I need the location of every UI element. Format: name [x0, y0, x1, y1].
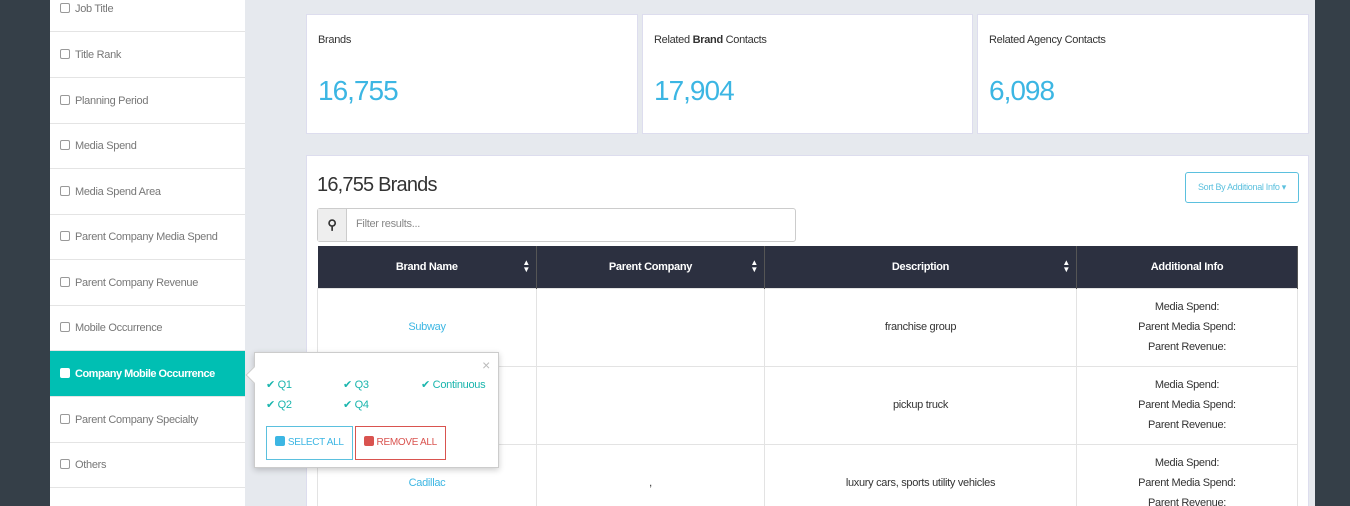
sidebar filter list: Others — [75, 459, 106, 471]
data table: ▲ — [522, 258, 530, 267]
data table: Parent Company — [609, 261, 692, 273]
data table: pickup truck — [893, 399, 948, 411]
data table: franchise group — [885, 321, 956, 333]
data table: Parent Media Spend: — [1138, 321, 1236, 333]
card: related agency contacts: Related Agency Contacts — [989, 34, 1106, 46]
data table: Parent Media Spend: — [1138, 477, 1236, 489]
card: related brand contacts — [642, 14, 973, 134]
sidebar filter list: Planning Period — [75, 95, 148, 107]
sidebar filter list: Job Title — [75, 3, 113, 15]
popover: quarter options: ✔ Q2 — [266, 399, 292, 411]
card: related agency contacts: 6,098 — [989, 75, 1054, 106]
card: brands: 16,755 — [318, 75, 398, 106]
card: related brand contacts: 17,904 — [654, 75, 734, 106]
data table: Media Spend: — [1155, 379, 1219, 391]
sidebar filter list: Parent Company Media Spend — [75, 231, 218, 243]
remove all button: REMOVE ALL — [377, 437, 437, 448]
popover: quarter options: ✔ Continuous — [421, 379, 485, 391]
select all button: SELECT ALL — [288, 437, 344, 448]
data table — [317, 246, 1298, 506]
popover: quarter options: ✔ Q3 — [343, 379, 369, 391]
data table: Brand Name — [396, 261, 458, 273]
left dark strip — [0, 0, 50, 506]
active filter item: Company Mobile Occurrence — [75, 368, 215, 380]
card: related agency contacts — [977, 14, 1309, 134]
sidebar filter list: Mobile Occurrence — [75, 322, 162, 334]
data table: Parent Revenue: — [1148, 419, 1226, 431]
sort button — [1185, 172, 1299, 203]
search box: ⚲ — [327, 217, 337, 232]
sidebar filter list: Media Spend Area — [75, 186, 161, 198]
popover: quarter options — [254, 352, 499, 468]
popover: quarter options: ✔ Q4 — [343, 399, 369, 411]
sidebar filter list — [50, 0, 245, 506]
data table: ▲ — [1062, 258, 1070, 267]
search box — [317, 208, 796, 242]
sidebar filter list: Parent Company Revenue — [75, 277, 198, 289]
card: brands: Brands — [318, 34, 351, 46]
data table: luxury cars, sports utility vehicles — [846, 477, 995, 489]
data table: Parent Media Spend: — [1138, 399, 1236, 411]
data table: Additional Info — [1151, 261, 1223, 273]
data table: , — [649, 477, 652, 489]
remove all button — [355, 426, 446, 460]
card: brands — [306, 14, 638, 134]
sidebar filter list: Media Spend — [75, 140, 137, 152]
card: related brand contacts: Related Brand Contacts — [654, 34, 767, 46]
popover: quarter options: ✔ Q1 — [266, 379, 292, 391]
data table: Subway — [408, 321, 446, 333]
sidebar filter list: Parent Company Specialty — [75, 414, 198, 426]
data table: Parent Revenue: — [1148, 341, 1226, 353]
data table: Cadillac — [409, 477, 445, 489]
select all button — [266, 426, 353, 460]
data table: Description — [892, 261, 949, 273]
data table: ▼ — [1062, 265, 1070, 274]
data table: ▼ — [522, 265, 530, 274]
panel heading: 16,755 Brands — [317, 174, 437, 196]
main panel — [306, 155, 1309, 506]
popover: quarter options: × — [482, 357, 490, 373]
sort button: Sort By Additional Info ▾ — [1198, 182, 1286, 192]
right dark strip — [1315, 0, 1350, 506]
sidebar filter list: Title Rank — [75, 49, 121, 61]
active filter item — [50, 351, 245, 397]
data table: ▼ — [750, 265, 758, 274]
data table: Media Spend: — [1155, 457, 1219, 469]
search box: Filter results... — [356, 218, 420, 230]
data table: ▲ — [750, 258, 758, 267]
data table: Media Spend: — [1155, 301, 1219, 313]
